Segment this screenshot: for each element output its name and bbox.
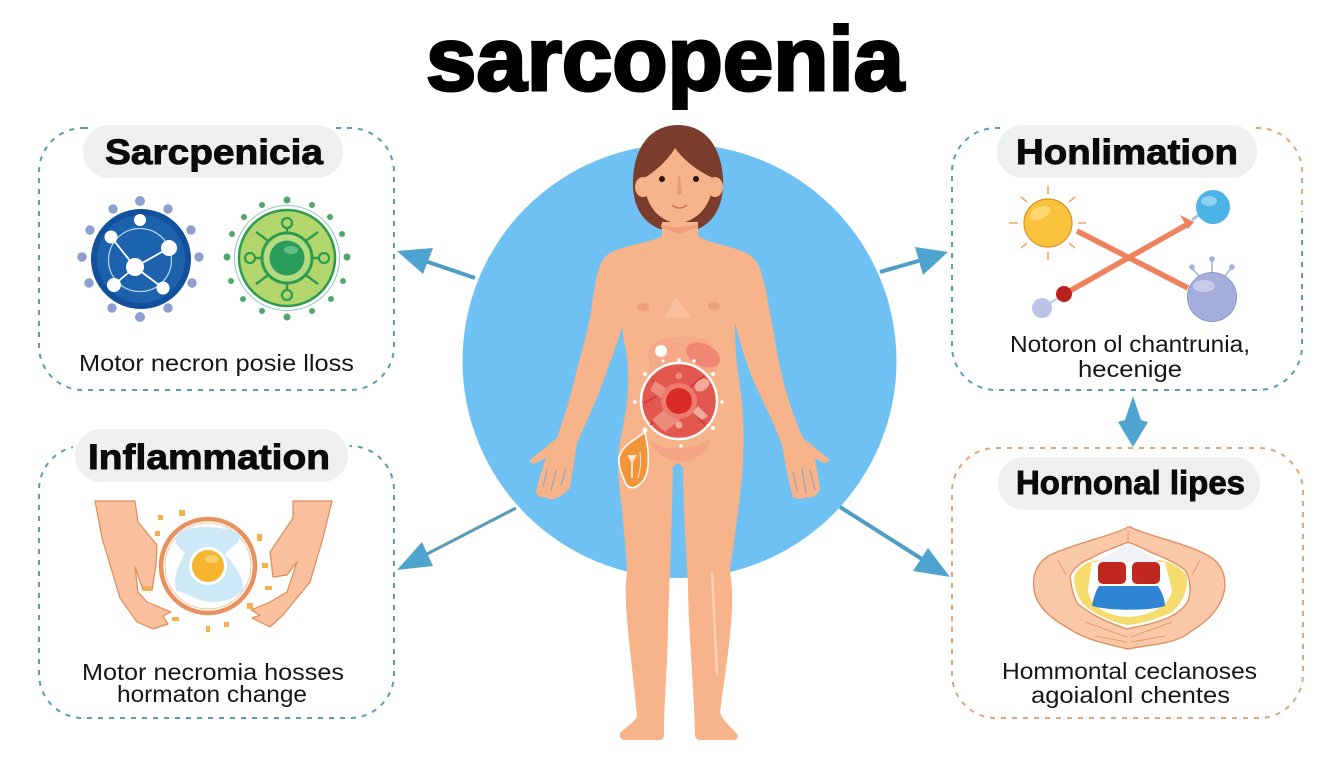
gland yellow (1074, 560, 1187, 625)
dashed frame (39, 446, 394, 718)
pale ball (1032, 297, 1060, 318)
white vesicle (655, 345, 667, 357)
face (644, 148, 713, 223)
arrow: body to lower-left panel (397, 508, 516, 570)
dashed frame (39, 128, 394, 390)
spleen (682, 337, 724, 373)
arrow: body to lower-right panel (840, 507, 950, 577)
red cell magnified (641, 363, 717, 439)
coral arrows crossing (1068, 224, 1188, 292)
eyes (659, 176, 699, 182)
smile (672, 205, 687, 208)
left hand (95, 501, 171, 629)
finger lines (543, 468, 815, 493)
right hand (251, 501, 332, 627)
icon: green cell (224, 196, 350, 320)
heading pill (998, 457, 1260, 510)
description line 1: Notoron ol chantrunia, (1010, 331, 1250, 357)
blue ball (1192, 190, 1230, 224)
heading pill (997, 125, 1257, 178)
panel: Sarcpenicia (39, 125, 394, 390)
arrow: body to upper-right panel (880, 247, 948, 275)
red block right (1132, 562, 1160, 584)
dashed frame orange corner (1256, 128, 1302, 212)
pelvic region (650, 438, 711, 461)
coral arrow head (1180, 215, 1194, 229)
right ear (707, 177, 723, 197)
arrow: vertical link between right panels (1118, 396, 1148, 447)
left ear (635, 177, 651, 197)
heading pill (83, 125, 343, 178)
cupped hands (1034, 527, 1225, 649)
title: sarcopenia (426, 10, 905, 110)
description line 2: hecenige (1078, 356, 1182, 382)
heading: Inflammation (88, 438, 330, 477)
neck shadow (661, 224, 698, 234)
body silhouette (530, 222, 829, 740)
description: Motor necron posie lloss (79, 350, 354, 376)
red block left (1098, 562, 1126, 584)
heading: Hornonal lipes (1016, 464, 1245, 501)
gland white centre (1088, 562, 1172, 617)
sun (1009, 186, 1086, 260)
hair (633, 125, 723, 229)
white sparkle dots (633, 358, 724, 448)
ring (161, 519, 255, 613)
leg highlight (712, 572, 717, 675)
heading pill (75, 429, 348, 482)
purple ball (1188, 256, 1236, 322)
description line 2: hormaton change (117, 681, 307, 707)
panel: Hornonal lipes (952, 448, 1303, 718)
top white cap (1096, 544, 1160, 562)
pink abdomen (648, 337, 718, 372)
panel: Honlimation (952, 125, 1302, 390)
icon: interacting molecules (1009, 186, 1236, 322)
heading: Sarcpenicia (105, 133, 324, 172)
yolk (192, 550, 224, 582)
nose (677, 176, 682, 195)
arrow: body to upper-left panel (397, 248, 475, 278)
orange organ callout (619, 432, 648, 488)
debris (143, 510, 272, 632)
heading: Honlimation (1016, 133, 1238, 172)
description line 1: Motor necromia hosses (82, 659, 344, 685)
central blue circle (462, 144, 896, 578)
panel: Inflammation (39, 429, 394, 718)
icon: blue neuron cell (77, 196, 204, 322)
dashed frame teal part (952, 128, 1302, 390)
finger lines (1058, 530, 1200, 642)
icon: hands around inflamed cell (95, 501, 332, 632)
dashed frame (952, 448, 1303, 718)
yolk halo (189, 547, 227, 585)
human figure (530, 125, 829, 740)
blue block (1092, 586, 1165, 610)
icon: hands around hormone gland (1034, 527, 1225, 649)
chest (637, 297, 720, 318)
description line 2: agoialonl chentes (1031, 682, 1230, 708)
red dot (1056, 286, 1072, 302)
blue cytoplasm (175, 527, 243, 602)
description line 1: Hommontal ceclanoses (1002, 658, 1257, 684)
